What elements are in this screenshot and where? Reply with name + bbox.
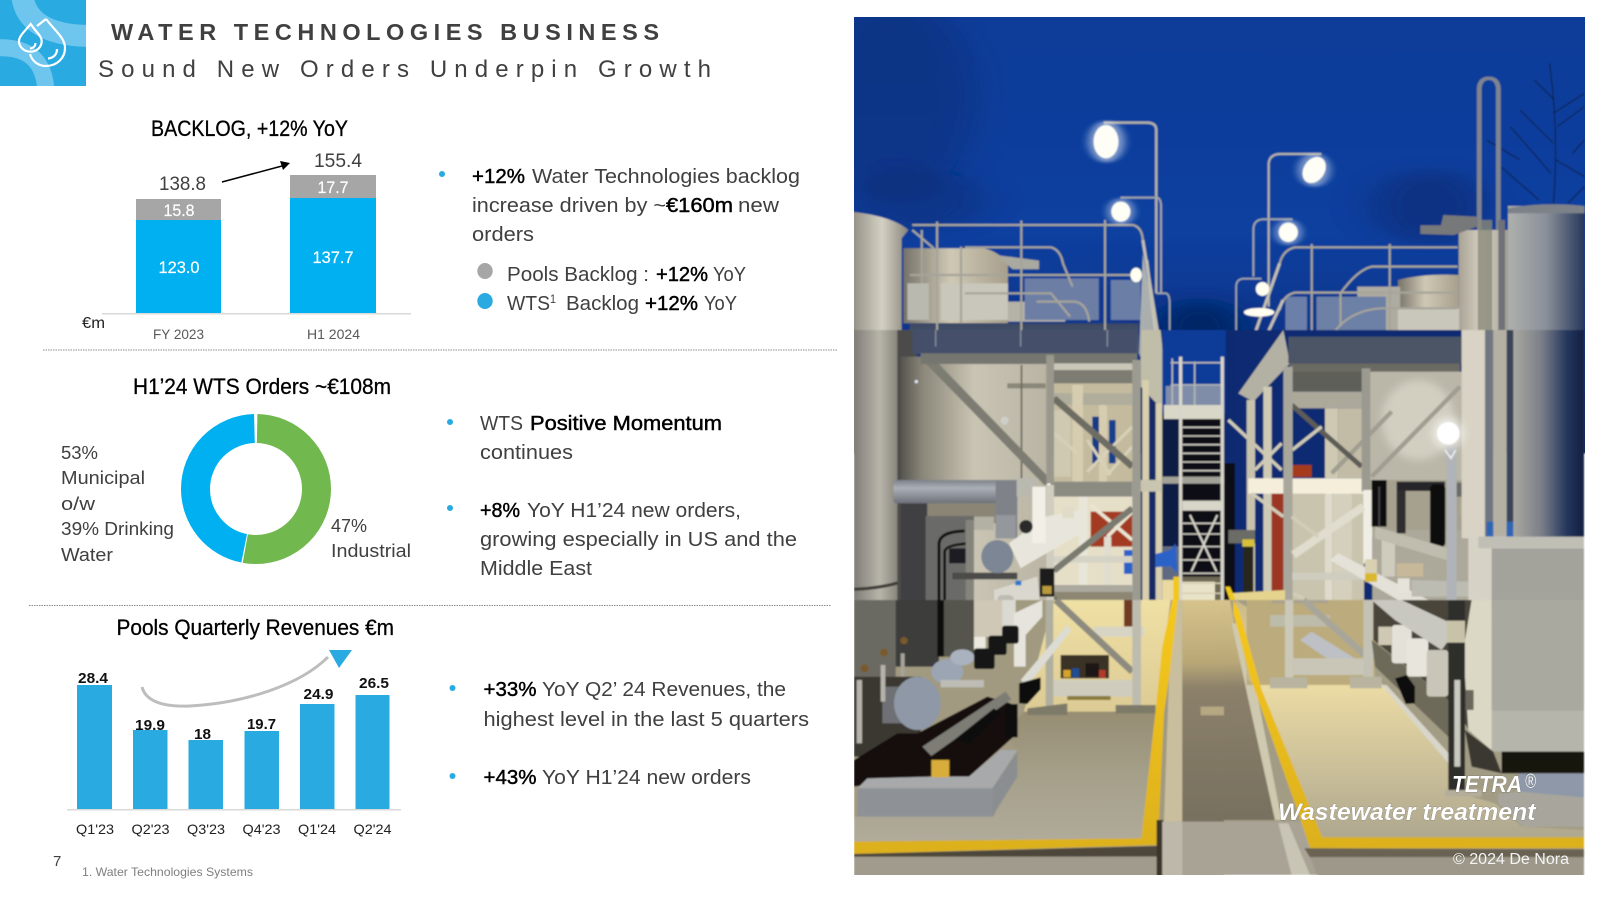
donut label: industrial: 47% [331,515,367,536]
panel: photo of wastewater plant [812,0,1596,877]
text block: pools commentary [450,679,809,789]
text block: backlog commentary: new [738,195,780,217]
text block: backlog commentary: increase driven by ~ [472,195,666,217]
text block: pools commentary: +33% [484,679,537,701]
text block: WTS commentary: growing especially in US and the [480,529,797,551]
bar: H1 2024 stacked [290,175,376,313]
text block: WTS commentary: Middle East [480,558,592,580]
axis label H1 2024: H1 2024 [307,326,360,342]
photo middle left: tanks, deck, frame, pipes, stairs [854,330,1226,613]
total label H1 2024: 155.4 [314,151,362,172]
subtitle: Sound New Orders Underpin Growth [98,56,711,83]
legend: pools backlog: +12% [656,264,708,286]
donut label: municipal: Municipal [61,467,145,488]
photo lower right: floor, kerb, cabinet, machinery [1224,600,1584,877]
donut label: municipal: 53% [61,442,98,463]
total label FY 2023: 138.8 [159,174,206,195]
page number: 7 [53,853,61,870]
text block: WTS commentary: YoY H1’24 new orders, [527,500,741,522]
donut label: municipal [61,442,174,565]
text block: pools commentary: highest level in the last 5 quarters [484,709,809,731]
text block: backlog commentary: +12% [472,166,525,188]
bar chart: Q1'23 [76,821,114,837]
photo caption: ® [1525,771,1536,793]
bar chart: 28.4 [78,671,108,687]
arrow: rising trend curve [142,650,352,706]
text block: WTS commentary: WTS [480,413,523,435]
donut chart [196,428,316,550]
text block: WTS commentary: +8% [480,500,520,522]
donut label: industrial: Industrial [331,540,411,561]
bar chart: Q1'24 [298,821,336,837]
bar chart: Q4'23 [242,821,281,837]
bar chart [67,671,401,837]
legend: WTS backlog: YoY [704,293,737,315]
bar chart: 24.9 [304,687,334,703]
photo caption: TETRA [1452,771,1522,797]
legend: WTS backlog: WTS [507,293,550,315]
photo copyright: © 2024 De Nora [1453,851,1569,868]
bar chart: Q2'24 [354,821,392,837]
bar chart: 18 [194,727,211,743]
bar chart: 26.5 [359,676,389,692]
text block: pools commentary: YoY Q2’ 24 Revenues, the [542,679,786,701]
panel: pools quarterly revenues [67,615,401,837]
arrow: growth [222,161,290,182]
text block: backlog commentary: orders [472,224,534,246]
legend: pools backlog: YoY [713,264,746,286]
text block: pools commentary: YoY H1’24 new orders [542,767,751,789]
bar: H1 2024 stacked: 137.7 [312,248,354,267]
donut label: municipal: o/w [61,493,96,514]
text block: WTS commentary: continues [480,442,573,464]
bar: FY 2023 stacked: 123.0 [158,258,200,277]
axis label FY 2023: FY 2023 [153,326,204,342]
bar: FY 2023 stacked: 15.8 [164,201,194,220]
text block: backlog commentary: €160m [666,195,733,217]
icon: water drops logo [0,0,86,86]
legend: pools backlog: Pools Backlog : [507,264,649,286]
text block: pools commentary: +43% [484,767,537,789]
text block: backlog commentary [439,166,800,315]
bar chart: 19.7 [247,717,276,733]
legend: WTS backlog: 1 [550,292,556,306]
bar chart: Q3'23 [187,821,225,837]
text block: backlog commentary: Water Technologies backlog [532,166,800,188]
legend: WTS backlog [477,292,737,315]
heading: WTS orders: H1’24 WTS Orders ~€108m [133,374,391,399]
bar: H1 2024 stacked: 17.7 [318,178,348,197]
unit label: €m [82,315,105,332]
donut label: industrial [331,515,411,561]
photo lower left: pumps, concrete floor, yellow kerb [854,600,1224,877]
bar chart: Q2'23 [132,821,170,837]
photo caption: Wastewater treatment [1278,799,1537,826]
legend: WTS backlog: Backlog [566,293,639,315]
title: WATER TECHNOLOGIES BUSINESS [111,19,659,45]
footnote: 1. Water Technologies Systems [82,865,253,879]
heading: pools revenues: Pools Quarterly Revenues €m [116,615,394,640]
heading: backlog: BACKLOG, +12% YoY [151,116,348,141]
panel: backlog chart [82,116,411,342]
photo upper part: sky, lamps, tanks and railings [854,17,1585,454]
bar: FY 2023 stacked [136,199,221,313]
text block: WTS commentary [447,413,797,580]
legend: WTS backlog: +12% [645,293,698,315]
photo caption [1280,773,1536,820]
text block: WTS commentary: Positive Momentum [530,413,722,435]
bar chart: 19.9 [135,718,165,734]
donut label: municipal: 39% Drinking [61,518,174,539]
panel: WTS orders donut [61,374,411,565]
legend: pools backlog [477,263,746,286]
donut label: municipal: Water [61,544,113,565]
photo middle right: frame, pipes, big tank, lamp [1215,330,1584,610]
